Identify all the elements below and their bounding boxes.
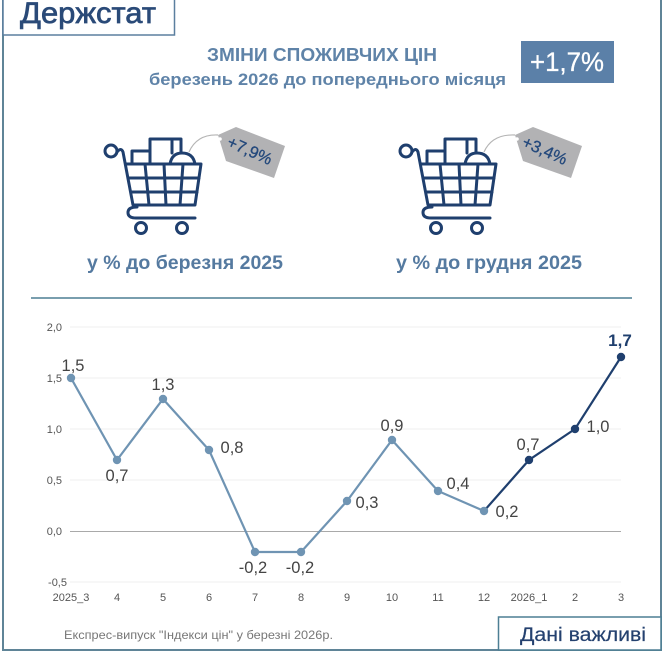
y-axis labels: 0,0	[47, 526, 62, 538]
icon: shopping cart, March 2025	[105, 139, 201, 234]
y-axis labels: 1,5	[47, 373, 62, 385]
price tag: +3,4%: +3,4%	[519, 133, 570, 169]
title: березень 2026 до попереднього місяця	[149, 70, 506, 89]
data labels: 0,8	[221, 439, 243, 457]
data labels: 1,3	[152, 376, 174, 394]
x-axis labels: 5	[160, 592, 166, 604]
footer box: Дані важливі: Дані важливі	[520, 625, 646, 646]
logo box: Держстат	[3, 0, 174, 35]
label: to March 2025: у % до березня 2025	[87, 253, 283, 274]
data labels: 0,9	[381, 417, 403, 435]
data labels: 0,7	[106, 467, 128, 485]
source note: Експрес-випуск "Індекси цін" у березні 2026р.	[64, 630, 333, 642]
price tag: +7,9%	[189, 127, 285, 178]
data labels: 1,5	[62, 357, 84, 375]
data labels: 0,7	[517, 436, 539, 454]
x-axis labels: 12	[478, 592, 490, 604]
y-axis labels	[47, 322, 67, 589]
data line: earlier months	[71, 378, 484, 552]
data line: latest months	[484, 357, 621, 511]
data labels: -0,2	[239, 559, 267, 577]
x-axis labels: 2	[572, 592, 578, 604]
data labels: 1,7	[608, 331, 632, 350]
title: ЗМІНИ СПОЖИВЧИХ ЦІН	[207, 44, 437, 65]
x-axis labels: 8	[298, 592, 304, 604]
y-axis labels: -0,5	[48, 577, 67, 589]
icon: shopping cart, December 2025	[400, 139, 496, 234]
data labels: -0,2	[286, 559, 314, 577]
footer box: Дані важливі	[498, 617, 661, 650]
x-axis labels: 10	[386, 592, 398, 604]
y-axis labels: 2,0	[47, 322, 62, 334]
callout: monthly change	[521, 41, 614, 83]
x-axis labels: 2026_1	[511, 592, 547, 604]
y-axis labels: 0,5	[47, 475, 62, 487]
y-axis labels: 1,0	[47, 424, 62, 436]
x-axis labels: 4	[114, 592, 120, 604]
x-axis labels: 6	[206, 592, 212, 604]
x-axis labels: 11	[432, 592, 444, 604]
x-axis labels: 2025_3	[53, 592, 89, 604]
data labels: 0,2	[496, 503, 518, 521]
price tag: +3,4%	[484, 127, 582, 178]
price tag: +7,9%: +7,9%	[224, 133, 275, 169]
x-axis labels: 3	[618, 592, 624, 604]
callout: monthly change: +1,7%	[530, 47, 604, 77]
x-axis labels	[53, 592, 624, 604]
title	[149, 44, 506, 89]
data labels: 1,0	[587, 418, 609, 436]
data labels: 0,4	[447, 475, 469, 493]
x-axis labels: 9	[344, 592, 350, 604]
x-axis labels: 7	[252, 592, 258, 604]
label: to December 2025: у % до грудня 2025	[396, 253, 582, 274]
data points	[67, 353, 625, 556]
line chart: monthly price changes	[47, 322, 632, 604]
data labels: 0,3	[356, 494, 378, 512]
data labels	[62, 331, 632, 577]
